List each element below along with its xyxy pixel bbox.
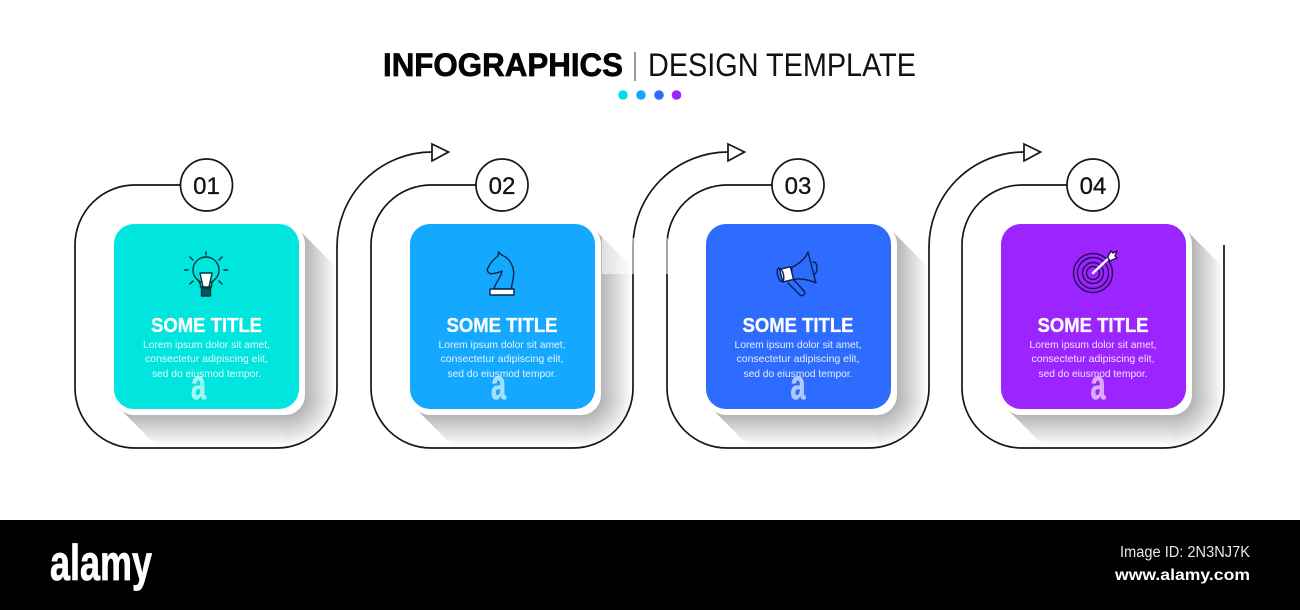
footer bar bbox=[0, 520, 1300, 610]
watermark letters: a bbox=[790, 361, 806, 408]
image id: Image ID: 2N3NJ7K bbox=[1120, 544, 1251, 561]
title: INFOGRAPHICS bbox=[383, 47, 623, 83]
watermark letters: a bbox=[491, 361, 506, 408]
step 3: Lorem ipsum dolor sit amet, bbox=[734, 339, 862, 351]
step 3: 03 bbox=[785, 173, 811, 200]
step 4 bbox=[962, 159, 1224, 448]
watermark haze bbox=[602, 238, 668, 274]
step 4: 04 bbox=[1080, 173, 1106, 200]
step 4: Lorem ipsum dolor sit amet, bbox=[1030, 339, 1156, 351]
icon: light bulb bbox=[184, 252, 228, 296]
step 2: 02 bbox=[489, 173, 515, 200]
step 3: SOME TITLE bbox=[742, 314, 854, 337]
step 3: consectetur adipiscing elit, bbox=[736, 353, 860, 365]
step 4: consectetur adipiscing elit, bbox=[1032, 353, 1154, 365]
step 2: Lorem ipsum dolor sit amet, bbox=[438, 339, 566, 351]
step 4: sed do eiusmod tempor. bbox=[1038, 368, 1148, 380]
step 2: sed do eiusmod tempor. bbox=[448, 368, 556, 380]
step 2: consectetur adipiscing elit, bbox=[440, 353, 564, 365]
step 1: Lorem ipsum dolor sit amet, bbox=[143, 339, 270, 351]
icon: megaphone bbox=[776, 252, 817, 296]
step 2 bbox=[371, 144, 744, 448]
title bbox=[383, 47, 916, 83]
icon: target with dart bbox=[1074, 251, 1117, 292]
step 1: SOME TITLE bbox=[151, 314, 262, 337]
step 1: consectetur adipiscing elit, bbox=[145, 353, 268, 365]
step 2: SOME TITLE bbox=[446, 314, 558, 337]
website: www.alamy.com bbox=[1114, 567, 1250, 584]
alamy logo: alamy bbox=[50, 535, 152, 591]
step 1: sed do eiusmod tempor. bbox=[152, 368, 261, 380]
watermark letters bbox=[191, 361, 1106, 408]
step 1: 01 bbox=[193, 173, 220, 200]
title: DESIGN TEMPLATE bbox=[648, 47, 916, 83]
watermark letters: a bbox=[1090, 361, 1106, 408]
icon: chess knight bbox=[487, 252, 514, 295]
step 4: SOME TITLE bbox=[1038, 314, 1148, 337]
step 3: sed do eiusmod tempor. bbox=[744, 368, 852, 380]
step 3 bbox=[667, 144, 1040, 448]
colour dots bbox=[618, 90, 681, 100]
step 1 bbox=[75, 144, 448, 448]
watermark letters: a bbox=[191, 361, 206, 408]
